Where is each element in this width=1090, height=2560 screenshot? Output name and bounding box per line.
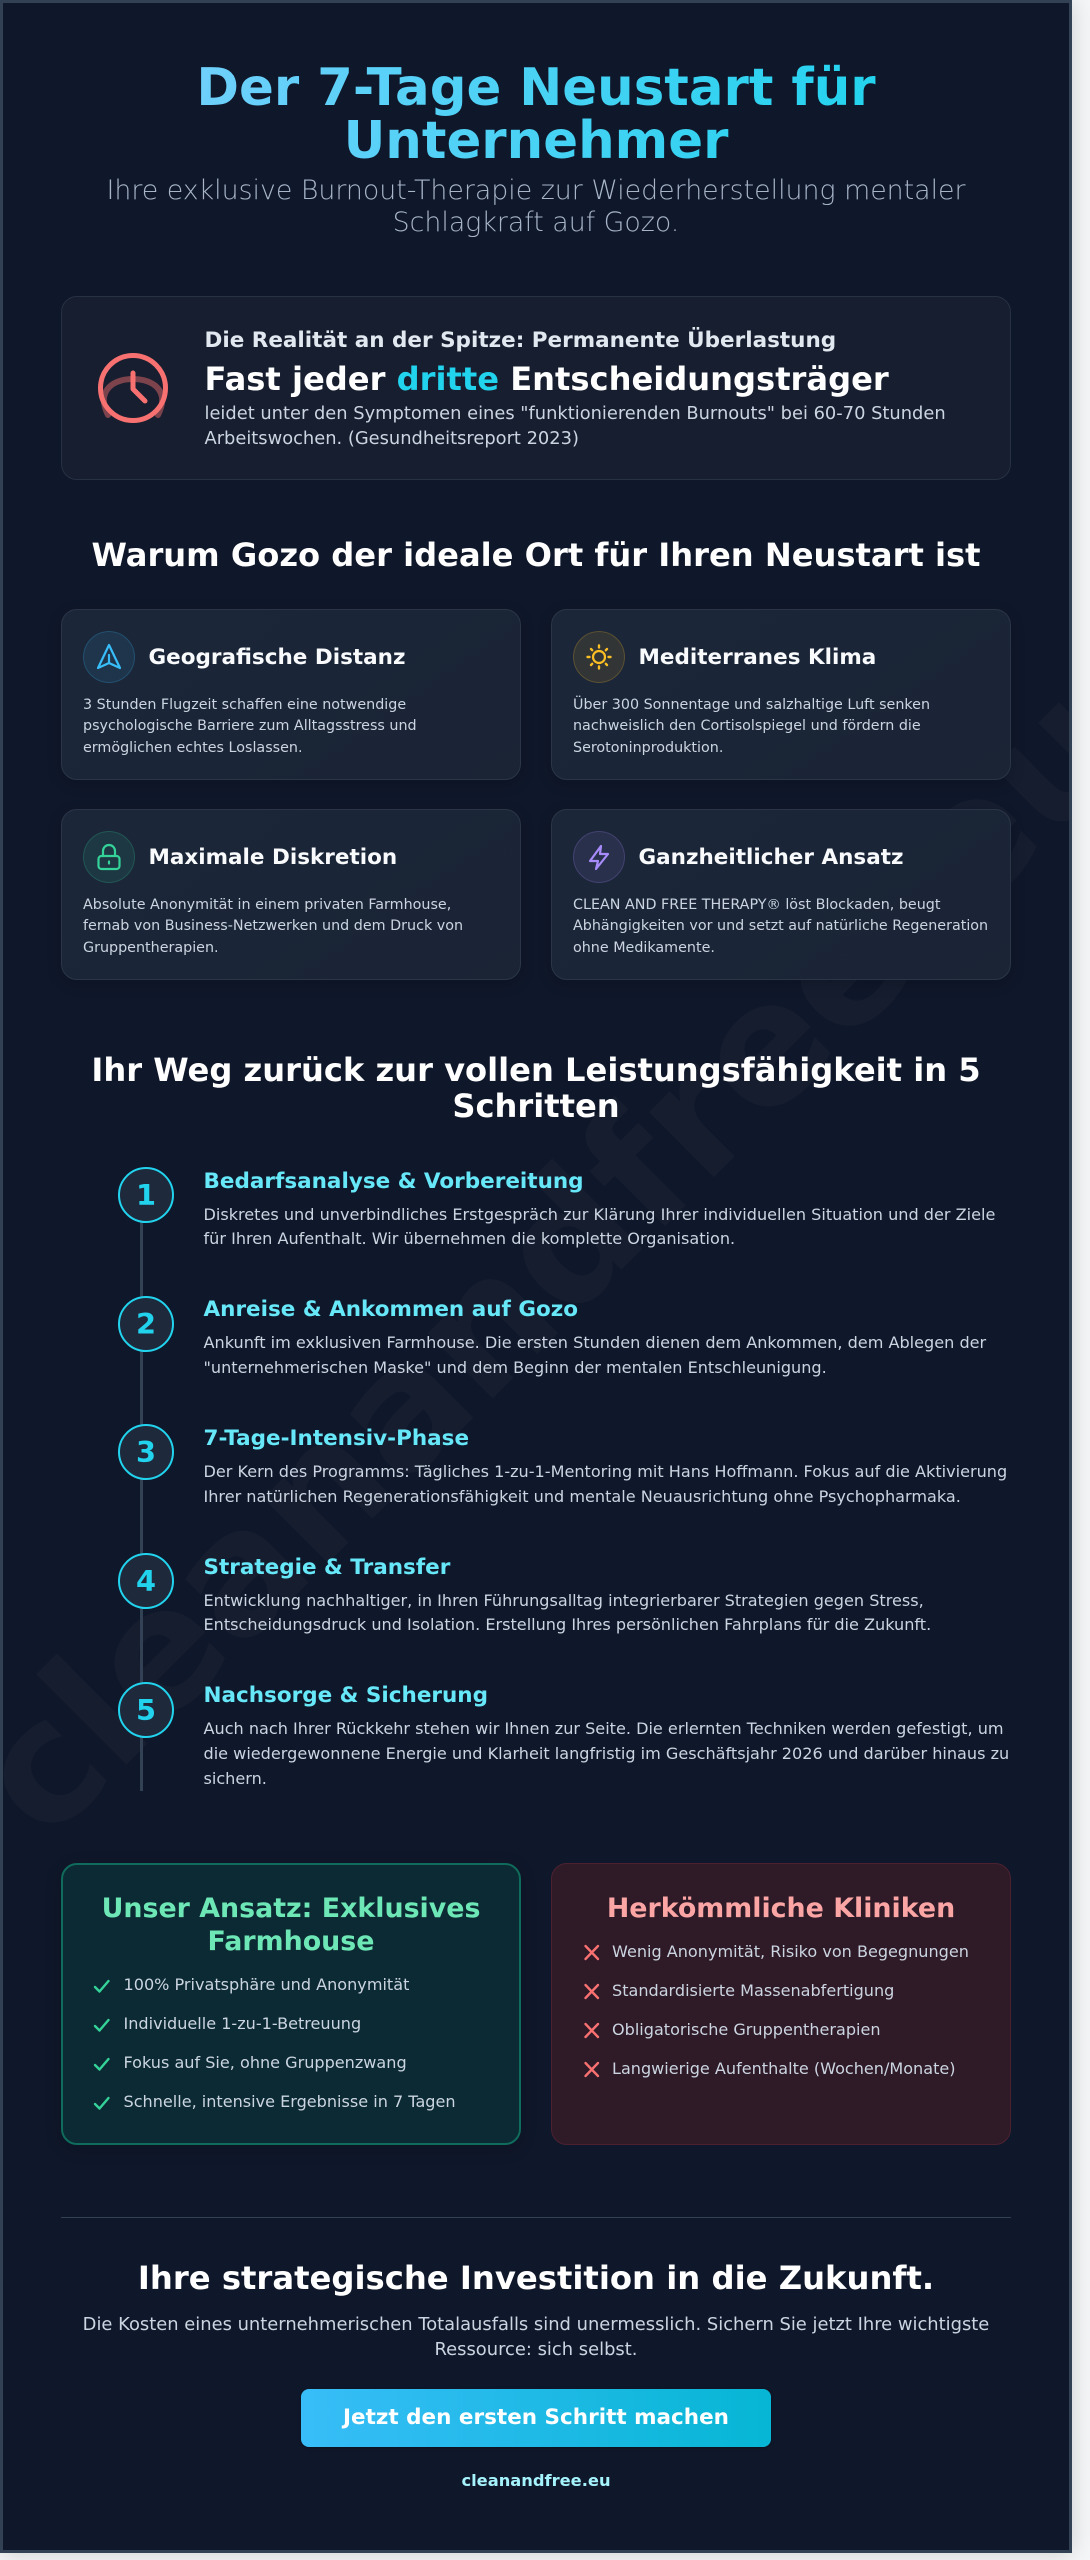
step text: Entscheidungsdruck und Isolation. Erstellung Ihres persönlichen Fahrplans für die Zukunft.	[204, 1615, 931, 1634]
heading: why Gozo: Warum Gozo der ideale Ort für Ihren Neustart ist	[91, 536, 981, 574]
step text: die wiedergewonnene Energie und Klarheit langfristig im Geschäftsjahr 2026 und darüber hinaus zu	[204, 1744, 1009, 1763]
closing text: Ressource: sich selbst.	[435, 2339, 637, 2360]
list item	[94, 1974, 410, 1994]
step text	[204, 1591, 931, 1634]
card text: Gruppentherapien.	[83, 940, 219, 956]
step text: Ihrer natürlichen Regenerationsfähigkeit und mentale Neuausrichtung ohne Psychopharmaka.	[204, 1487, 961, 1506]
panel: statistic	[61, 296, 1011, 480]
card text: Über 300 Sonnentage und salzhaltige Luft senken	[573, 697, 930, 713]
stat description: leidet unter den Symptomen eines "funktionierenden Burnouts" bei 60-70 Stunden	[204, 403, 946, 424]
step text: Ankunft im exklusiven Farmhouse. Die ersten Stunden dienen dem Ankommen, dem Ablegen der	[204, 1333, 986, 1352]
step text: Diskretes und unverbindliches Erstgespräch zur Klärung Ihrer individuellen Situation und der Ziele	[204, 1204, 995, 1224]
panel: conventional clinics: Obligatorische Gruppentherapien	[612, 2020, 881, 2038]
card text	[83, 697, 417, 756]
stat description: Arbeitswochen. (Gesundheitsreport 2023)	[204, 428, 579, 449]
card title: Mediterranes Klima	[638, 645, 876, 670]
list item	[94, 2052, 407, 2072]
subtitle: Schlagkraft auf Gozo.	[393, 206, 679, 238]
card text	[573, 696, 930, 756]
step text	[204, 1204, 995, 1248]
panel: conventional clinics: Standardisierte Massenabfertigung	[612, 1980, 894, 2000]
card text: 3 Stunden Flugzeit schaffen eine notwendige	[83, 697, 406, 713]
step title: 7-Tage-Intensiv-Phase	[204, 1426, 469, 1451]
heading: five steps: Schritten	[452, 1087, 620, 1125]
list item	[94, 2092, 456, 2110]
step title: Strategie & Transfer	[204, 1555, 450, 1580]
subtitle: Ihre exklusive Burnout-Therapie zur Wiederherstellung mentaler	[106, 174, 966, 206]
card text	[83, 897, 463, 956]
card text: ohne Medikamente.	[573, 940, 715, 956]
comparison heading: Herkömmliche Kliniken	[607, 1893, 955, 1924]
list item	[94, 2014, 361, 2032]
step title: Anreise & Ankommen auf Gozo	[204, 1297, 578, 1322]
card text: fernab von Business-Netzwerken und dem Druck von	[83, 918, 463, 934]
card text	[573, 897, 988, 956]
card text: Absolute Anonymität in einem privaten Farmhouse,	[83, 897, 451, 913]
panel: holistic approach	[551, 809, 1011, 980]
closing text: Die Kosten eines unternehmerischen Totalausfalls sind unermesslich. Sichern Sie jetzt Ihre wichtigste	[83, 2314, 989, 2335]
panel: conventional clinics	[551, 1863, 1011, 2145]
panel: mediterranean climate	[551, 609, 1011, 780]
step text: sichern.	[204, 1769, 267, 1788]
card text: nachweislich den Cortisolspiegel und fördern die	[573, 718, 921, 734]
icon: navigation	[83, 631, 135, 683]
step 2	[118, 1296, 986, 1377]
card text: Abhängigkeiten vor und setzt auf natürliche Regeneration	[573, 918, 988, 934]
card text: CLEAN AND FREE THERAPY® löst Blockaden, beugt	[573, 897, 940, 913]
step number: 2	[136, 1307, 156, 1341]
step text: Auch nach Ihrer Rückkehr stehen wir Ihnen zur Seite. Die erlernten Techniken werden gefestigt, um	[204, 1719, 1004, 1738]
list item	[584, 1942, 969, 1960]
step number: 1	[136, 1178, 156, 1212]
icon: lightning	[573, 831, 625, 883]
panel: conventional clinics: Wenig Anonymität, Risiko von Begegnungen	[612, 1942, 969, 1960]
step 1	[118, 1167, 995, 1248]
stat description	[204, 403, 946, 449]
heading: five steps	[91, 1051, 981, 1125]
panel: our approach: Individuelle 1-zu-1-Betreuung	[124, 2014, 361, 2032]
step title: Bedarfsanalyse & Vorbereitung	[204, 1168, 584, 1194]
step text: Entwicklung nachhaltiger, in Ihren Führungsalltag integrierbarer Strategien gegen Stress,	[204, 1591, 924, 1610]
panel: our approach: Fokus auf Sie, ohne Gruppenzwang	[124, 2052, 407, 2072]
card title: Geografische Distanz	[148, 645, 405, 670]
subtitle	[106, 174, 966, 238]
divider	[61, 2217, 1011, 2218]
comparison heading: Farmhouse	[208, 1926, 374, 1957]
step text	[204, 1462, 1007, 1506]
step number	[118, 1296, 174, 1352]
list item	[584, 2020, 881, 2038]
call to action button	[301, 2389, 771, 2447]
step number: 4	[136, 1564, 156, 1598]
step number	[118, 1682, 174, 1738]
panel: discretion	[61, 809, 521, 980]
step number: 3	[136, 1435, 156, 1469]
step number	[118, 1424, 174, 1480]
comparison heading: Unser Ansatz: Exklusives	[102, 1893, 480, 1924]
step number	[118, 1553, 174, 1609]
card text: psychologische Barriere zum Alltagsstress und	[83, 718, 417, 734]
step text: "unternehmerischen Maske" und dem Beginn der mentalen Entschleunigung.	[204, 1358, 827, 1377]
step text	[204, 1333, 986, 1377]
step 5	[118, 1682, 1009, 1788]
call to action button: Jetzt den ersten Schritt machen	[343, 2405, 729, 2430]
closing heading: Ihre strategische Investition in die Zukunft.	[138, 2259, 934, 2297]
stat headline: Fast jeder dritte Entscheidungsträger	[204, 360, 889, 398]
panel: our approach	[61, 1863, 521, 2145]
website link: cleanandfree.eu	[461, 2471, 611, 2490]
card text: Serotoninproduktion.	[573, 740, 723, 756]
icon: sun	[573, 631, 625, 683]
icon: clock	[98, 353, 168, 423]
step text: Der Kern des Programms: Tägliches 1-zu-1-Mentoring mit Hans Hoffmann. Fokus auf die Aktivierung	[204, 1462, 1007, 1481]
step number	[118, 1167, 174, 1223]
card text: ermöglichen echtes Loslassen.	[83, 740, 302, 756]
panel: our approach: 100% Privatsphäre und Anonymität	[124, 1974, 409, 1994]
title	[196, 58, 876, 171]
step 3	[118, 1424, 1007, 1506]
step text	[204, 1719, 1009, 1788]
title: Der 7-Tage Neustart für	[196, 58, 876, 118]
closing text	[83, 2314, 989, 2360]
step title: Nachsorge & Sicherung	[204, 1683, 488, 1708]
panel: conventional clinics: Langwierige Aufenthalte (Wochen/Monate)	[612, 2058, 956, 2078]
step number: 5	[136, 1693, 156, 1727]
panel: our approach: Schnelle, intensive Ergebnisse in 7 Tagen	[124, 2092, 456, 2110]
step text: für Ihren Aufenthalt. Wir übernehmen die komplette Organisation.	[204, 1229, 735, 1248]
stat label: Die Realität an der Spitze: Permanente Überlastung	[204, 328, 836, 353]
panel: geographic distance	[61, 609, 521, 780]
title: Unternehmer	[344, 111, 728, 171]
icon: lock	[83, 831, 135, 883]
card title: Maximale Diskretion	[148, 845, 397, 870]
list item	[584, 2058, 956, 2078]
comparison heading	[102, 1893, 480, 1957]
timeline line	[140, 1200, 142, 1791]
list item	[584, 1980, 894, 2000]
heading: five steps: Ihr Weg zurück zur vollen Leistungsfähigkeit in 5	[91, 1051, 981, 1089]
card title: Ganzheitlicher Ansatz	[638, 845, 904, 870]
step 4	[118, 1553, 931, 1634]
